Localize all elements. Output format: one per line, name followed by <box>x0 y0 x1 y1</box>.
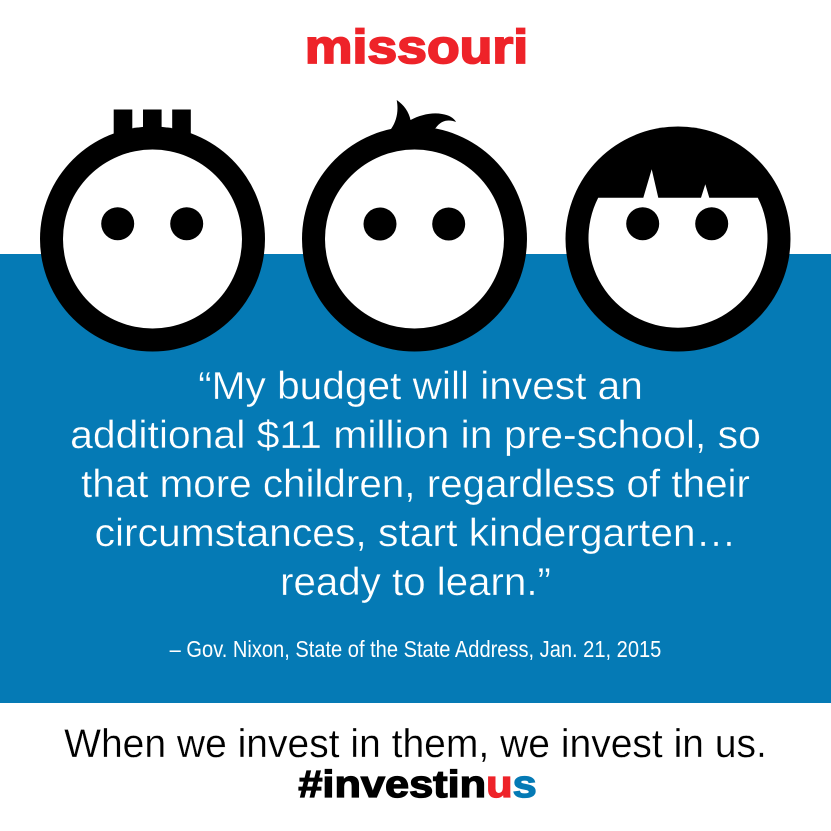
icon: boy face with tuft hair <box>302 100 527 352</box>
quote attribution: – Gov. Nixon, State of the State Address, Jan. 21, 2015 <box>170 636 661 662</box>
quote text: additional $11 million in pre-school, so <box>70 414 761 457</box>
title: missouri: missouri <box>304 20 528 73</box>
quote text: ready to learn.” <box>280 561 551 604</box>
quote text: that more children, regardless of their <box>81 463 750 506</box>
icon: girl face with fringe <box>566 126 790 352</box>
quote text <box>70 365 761 604</box>
blue panel <box>0 254 831 703</box>
hashtag: #investinus <box>298 764 536 806</box>
quote text: “My budget will invest an <box>198 365 643 408</box>
faces illustration <box>40 100 790 352</box>
icon: boy face with square hair <box>40 110 265 352</box>
tagline: When we invest in them, we invest in us. <box>64 722 767 766</box>
quote text: circumstances, start kindergarten… <box>95 512 736 555</box>
